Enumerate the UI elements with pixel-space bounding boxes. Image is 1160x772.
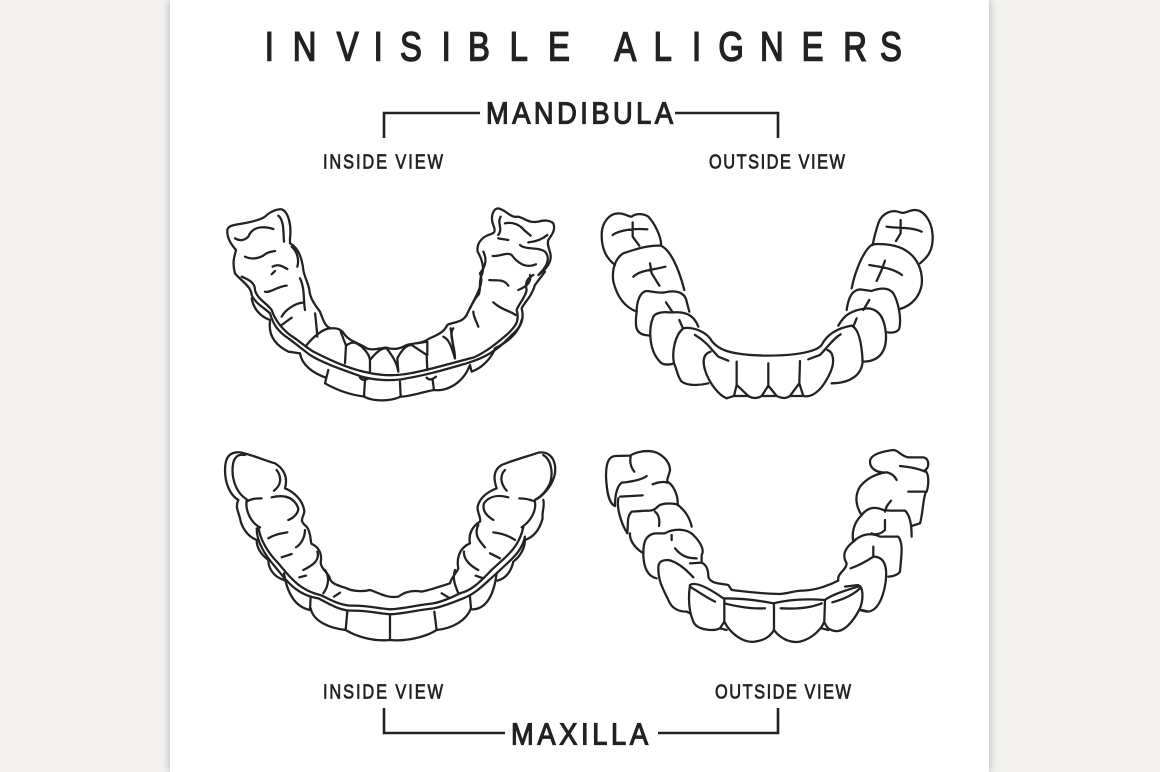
title: INVISIBLEALIGNERS — [265, 23, 902, 69]
illustration: mandibula outside view aligner — [602, 210, 933, 398]
label: mandibula inside view: INSIDE VIEW — [323, 150, 443, 173]
illustration: maxilla inside view aligner — [225, 452, 555, 640]
illustration: maxilla outside view aligner — [606, 450, 928, 642]
label: mandibula outside view: OUTSIDE VIEW — [709, 150, 845, 173]
illustration: mandibula inside view aligner — [227, 208, 554, 400]
heading: maxilla: MAXILLA — [511, 718, 649, 752]
label: maxilla inside view: INSIDE VIEW — [323, 680, 443, 703]
bracket: maxilla — [384, 708, 778, 733]
heading: mandibula: MANDIBULA — [486, 97, 674, 131]
white sheet panel — [170, 0, 989, 772]
bracket: mandibula — [384, 113, 778, 138]
label: maxilla outside view: OUTSIDE VIEW — [715, 680, 851, 703]
